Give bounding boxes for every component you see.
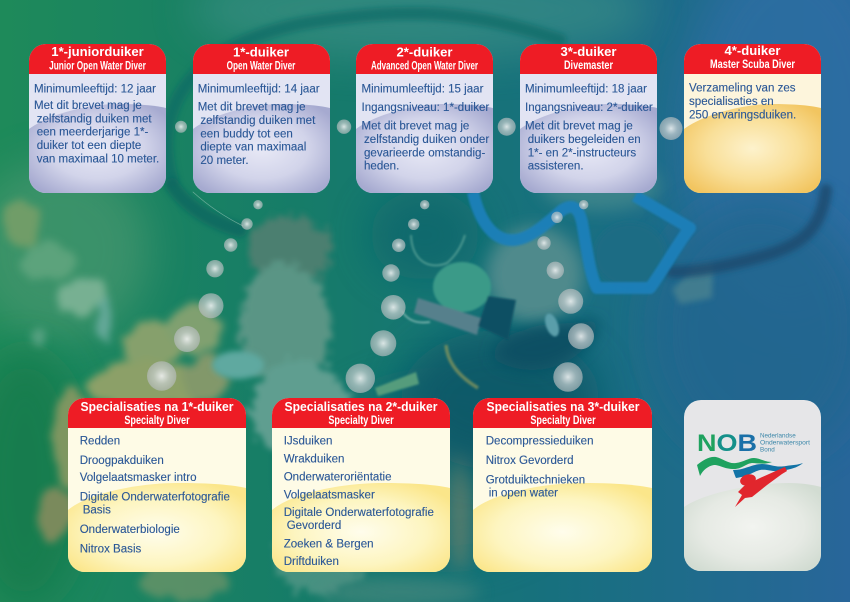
heading: Open Water Diver: [227, 60, 296, 72]
body text: zelfstandig duiken onder: [364, 134, 489, 146]
list: Onderwaterbiologie: [80, 524, 180, 536]
snorkel tube: [167, 13, 826, 272]
heading: Advanced Open Water Diver: [371, 60, 478, 72]
body text: gevarieerde omstandig-: [364, 147, 485, 159]
heading: [49, 44, 146, 72]
panel: specialisaties na 2*-duiker: [272, 398, 450, 572]
body text: Ingangsniveau: 2*-duiker: [525, 102, 653, 114]
body text: assisteren.: [528, 161, 584, 173]
list: Decompressieduiken: [486, 436, 594, 448]
bubbles: [147, 117, 682, 393]
body text: Verzameling van zes: [689, 83, 796, 95]
dive mask: [473, 192, 690, 288]
body text: duiker tot een diepte: [37, 140, 141, 152]
panel: 4*-duiker: [684, 43, 821, 193]
diver body: [370, 159, 713, 470]
body text: 1*- en 2*-instructeurs: [528, 147, 636, 159]
list: Zoeken & Bergen: [284, 538, 374, 550]
list: [486, 436, 594, 499]
list: Redden: [80, 436, 120, 448]
heading: Specialisaties na 1*-duiker: [80, 399, 234, 414]
heading: [227, 44, 296, 72]
panel: 2*-duiker: [356, 44, 493, 193]
heading: 1*-juniorduiker: [51, 44, 144, 59]
heading: [80, 399, 234, 427]
logo: NOB: [697, 430, 810, 507]
body text: [689, 83, 796, 121]
body text: [362, 83, 489, 173]
heading: Master Scuba Diver: [710, 59, 795, 71]
body text: Met dit brevet mag je: [525, 121, 633, 133]
body text: specialisaties en: [689, 96, 774, 108]
body text: 250 ervaringsduiken.: [689, 109, 796, 121]
body text: zelfstandig duiken met: [200, 115, 316, 127]
sponges and coral: [4, 199, 480, 602]
body text: van maximaal 10 meter.: [37, 153, 159, 165]
heading: [284, 399, 438, 427]
heading: Divemaster: [564, 60, 613, 72]
body text: Minimumleeftijd: 14 jaar: [198, 83, 320, 95]
body text: Minimumleeftijd: 15 jaar: [362, 83, 484, 95]
body text: Ingangsniveau: 1*-duiker: [362, 102, 489, 114]
body text: een buddy tot een: [200, 128, 293, 140]
list: Basis: [83, 505, 111, 517]
list: Grotduiktechnieken: [486, 474, 585, 486]
body text: Minimumleeftijd: 12 jaar: [34, 83, 156, 95]
logo: NOB: Onderwatersport: [760, 440, 810, 447]
heading: 2*-duiker: [396, 44, 453, 60]
list: IJsduiken: [284, 436, 332, 448]
list: Nitrox Basis: [80, 543, 142, 555]
heading: Junior Open Water Diver: [49, 60, 146, 72]
list: in open water: [489, 487, 558, 499]
heading: Specialisaties na 3*-duiker: [486, 399, 640, 414]
heading: [560, 44, 617, 72]
panel: specialisaties na 1*-duiker: [68, 398, 246, 572]
list: Droogpakduiken: [80, 455, 164, 467]
regulator: [375, 235, 562, 396]
panel: 1*-duiker: [193, 44, 330, 193]
list: Nitrox Gevorderd: [486, 455, 574, 467]
list: Gevorderd: [287, 520, 341, 532]
body text: een meerderjarige 1*-: [37, 127, 149, 139]
panel: 3*-duiker: [520, 44, 657, 193]
list: Digitale Onderwaterfotografie: [80, 492, 230, 504]
heading: 4*-duiker: [724, 43, 781, 58]
logo: NOB: Bond: [760, 447, 775, 454]
body text: zelfstandig duiken met: [37, 113, 152, 125]
body text: 20 meter.: [200, 155, 249, 167]
body text: [525, 83, 653, 173]
logo: NOB: NOB: [697, 430, 757, 457]
logo: NOB: Nederlandse: [760, 432, 796, 440]
heading: 3*-duiker: [560, 44, 617, 59]
heading: Specialty Diver: [328, 415, 394, 427]
body text: [198, 83, 320, 167]
panel: 1*-juniorduiker: [29, 44, 166, 193]
heading: Specialty Diver: [124, 415, 190, 427]
heading: Specialty Diver: [530, 415, 596, 427]
list: Volgelaatsmasker: [284, 489, 375, 501]
list: Digitale Onderwaterfotografie: [284, 507, 434, 519]
heading: [486, 399, 640, 427]
body text: duikers begeleiden en: [528, 134, 641, 146]
list: Driftduiken: [284, 556, 339, 568]
heading: [710, 43, 795, 71]
body text: [34, 83, 159, 165]
list: Wrakduiken: [284, 454, 344, 466]
body text: diepte van maximaal: [200, 142, 306, 154]
body text: Met dit brevet mag je: [198, 102, 306, 114]
list: [284, 436, 434, 568]
list: [80, 436, 230, 555]
body text: Minimumleeftijd: 18 jaar: [525, 83, 647, 95]
body text: Met dit brevet mag je: [34, 100, 142, 112]
list: Onderwateroriëntatie: [284, 471, 392, 483]
body text: heden.: [364, 161, 399, 173]
heading: Specialisaties na 2*-duiker: [284, 399, 438, 414]
panel: specialisaties na 3*-duiker: [473, 398, 652, 572]
body text: Met dit brevet mag je: [362, 121, 469, 133]
heading: 1*-duiker: [233, 44, 289, 60]
panel: NOB logo card: [684, 400, 821, 571]
heading: [371, 44, 478, 72]
list: Volgelaatsmasker intro: [80, 472, 197, 484]
